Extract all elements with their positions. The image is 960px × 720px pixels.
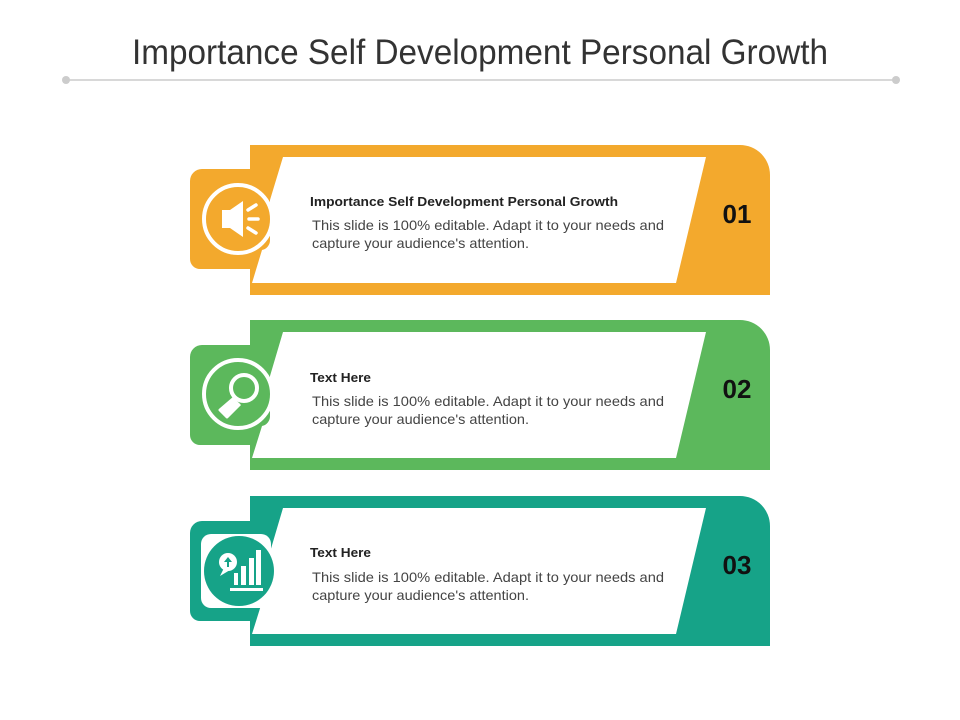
- text block 3: Text Here: [310, 545, 371, 560]
- text block 2: [310, 370, 664, 427]
- icon: growth chart: [201, 534, 274, 608]
- text block 1: This slide is 100% editable. Adapt it to your needs and: [312, 217, 664, 233]
- text block 3: This slide is 100% editable. Adapt it to your needs and: [312, 569, 664, 585]
- card 2: [190, 320, 770, 470]
- text block 2: capture your audience's attention.: [312, 411, 529, 427]
- card 1: [190, 145, 770, 295]
- number 02: 02: [723, 374, 751, 404]
- icon: megaphone: [204, 185, 272, 253]
- text block 1: Importance Self Development Personal Growth: [310, 194, 618, 209]
- card 3: [190, 496, 770, 646]
- text block 3: [310, 545, 664, 603]
- text block 3: capture your audience's attention.: [312, 587, 529, 603]
- text block 1: capture your audience's attention.: [312, 235, 529, 251]
- icon: magnifier: [204, 360, 272, 428]
- number 03: 03: [723, 550, 751, 580]
- text block 2: Text Here: [310, 370, 371, 385]
- text block 2: This slide is 100% editable. Adapt it to your needs and: [312, 393, 664, 409]
- title: Importance Self Development Personal Growth: [132, 33, 828, 72]
- number 01: 01: [723, 199, 751, 229]
- text block 1: [310, 194, 664, 251]
